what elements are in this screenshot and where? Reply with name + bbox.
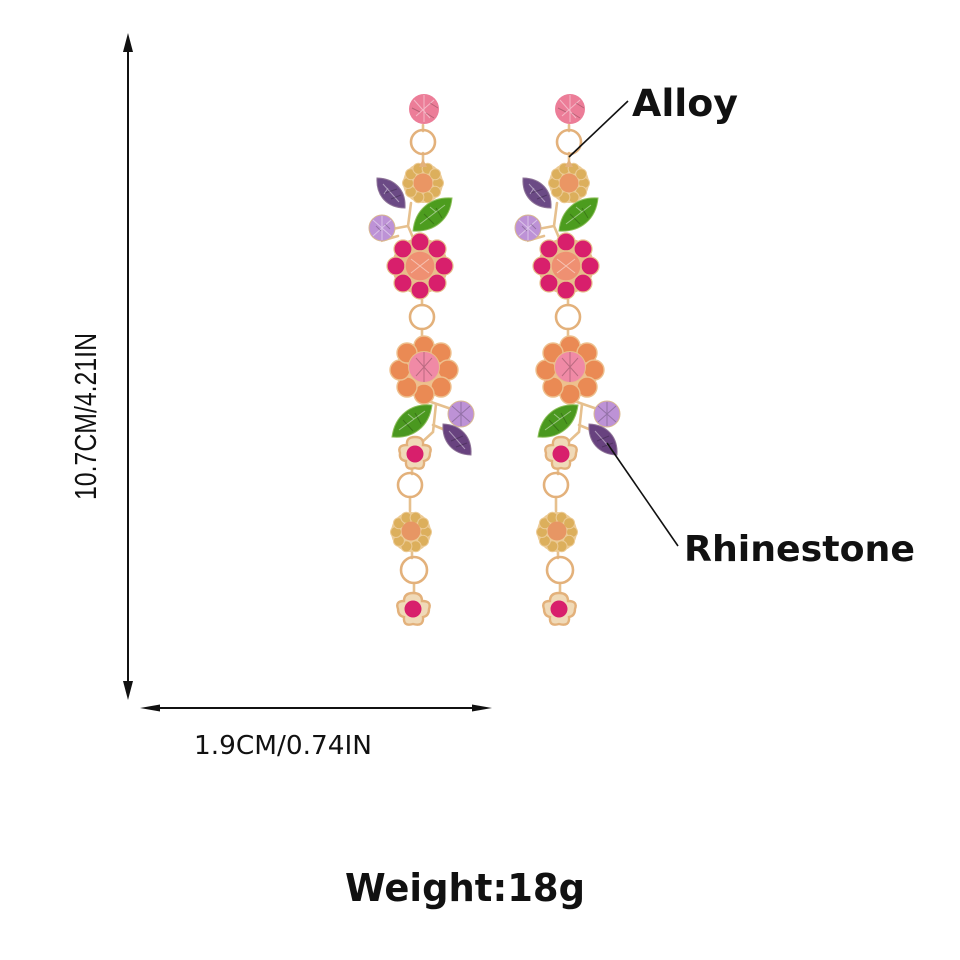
link ring [410, 305, 434, 329]
height dimension arrow [123, 33, 133, 700]
width dimension arrow [140, 704, 492, 712]
purple marquise stone [377, 178, 405, 208]
lilac stone [369, 215, 395, 241]
link ring [398, 473, 422, 497]
purple marquise stone [443, 424, 471, 455]
rhinestone label: Rhinestone [684, 529, 915, 570]
small flower [397, 593, 430, 625]
right earring [515, 94, 620, 625]
alloy leader line [569, 101, 628, 157]
small flower [399, 437, 431, 469]
yellow flower [402, 159, 444, 203]
orange flower [390, 336, 458, 404]
pink flower [387, 233, 453, 299]
green leaf stone [392, 405, 432, 437]
green leaf stone [413, 198, 452, 231]
weight label: Weight:18g [345, 866, 585, 910]
left earring [369, 94, 474, 625]
stud: pink crystal [409, 94, 439, 124]
link ring [401, 557, 427, 583]
height label: 10.7CM/4.21IN [68, 333, 103, 500]
yellow flower [390, 512, 432, 552]
stems and links [384, 125, 460, 594]
alloy label: Alloy [632, 82, 738, 125]
rhinestone leader line [607, 443, 678, 546]
link ring [411, 130, 435, 154]
lilac stone [448, 401, 474, 427]
width label: 1.9CM/0.74IN [194, 731, 372, 761]
